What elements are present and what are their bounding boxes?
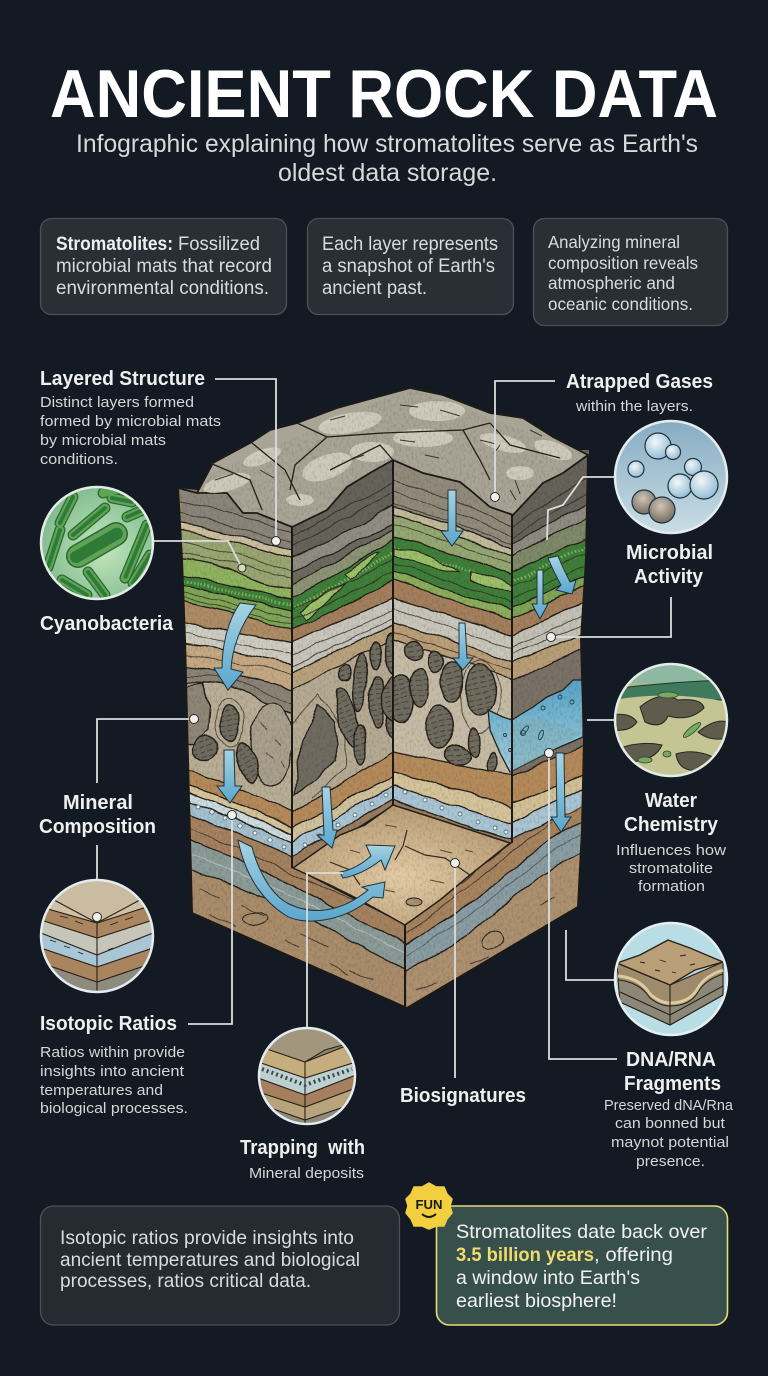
panel: isotopic ratios summary (40, 1206, 400, 1325)
label: isotopic ratios: Isotopic Ratios (40, 1013, 177, 1035)
label: DNA/RNA fragments (604, 1049, 734, 1170)
panel: stromatolites definition: microbial mats that record (56, 256, 272, 277)
panel: each layer (308, 218, 514, 314)
block edges (178, 455, 588, 1008)
subtitle: oldest data storage. (278, 159, 497, 187)
badge: fun: FUN (416, 1197, 442, 1212)
panel: each layer: a snapshot of Earth's (322, 256, 495, 277)
panel: each layer: ancient past. (322, 278, 427, 299)
label: isotopic ratios (40, 1013, 188, 1117)
label: trapped gases (566, 371, 713, 415)
panel: fun fact: earliest biosphere! (456, 1290, 617, 1312)
label: water chemistry: Chemistry (624, 814, 719, 836)
label: DNA/RNA fragments: maynot potential (611, 1134, 729, 1151)
label: microbial activity: Microbial (626, 542, 713, 564)
title: ANCIENT ROCK DATA (50, 56, 718, 132)
panel: mineral analysis: atmospheric and (548, 273, 675, 293)
icon: trapping layers (258, 1028, 356, 1130)
panel: stromatolites definition (40, 218, 286, 314)
label: trapped gases: Atrapped Gases (566, 371, 713, 393)
panel: fun fact: a window into Earth's (456, 1267, 640, 1289)
label: microbial activity: Activity (634, 566, 704, 588)
label: DNA/RNA fragments: Preserved dNA/Rna (604, 1097, 734, 1114)
label: water chemistry: formation (638, 878, 705, 895)
label: layered structure: by microbial mats (40, 432, 166, 449)
label: mineral composition (39, 792, 156, 838)
label: isotopic ratios: Ratios within provide (40, 1044, 185, 1061)
panel: isotopic ratios summary: processes, ratios critical data. (60, 1270, 311, 1292)
label: isotopic ratios: temperatures and (40, 1082, 163, 1099)
label: mineral composition: Mineral (63, 792, 133, 814)
panel: fun fact: , offering (594, 1244, 673, 1266)
water pocket (488, 680, 583, 772)
subtitle: Infographic explaining how stromatolites serve as Earth's (76, 130, 698, 158)
label: layered structure: Layered Structure (40, 368, 205, 390)
arrows (214, 490, 576, 921)
label: microbial activity (626, 542, 713, 588)
label: water chemistry: Influences how (616, 842, 726, 859)
panel: mineral analysis: composition reveals (548, 253, 698, 273)
icon: cyanobacteria (41, 487, 153, 599)
icon: mineral layers (41, 880, 153, 1000)
face: middle left (293, 462, 392, 867)
face: middle right (394, 462, 511, 842)
label: layered structure: formed by microbial mats (40, 413, 221, 430)
label: trapping: Mineral deposits (249, 1165, 364, 1182)
badge: fun (406, 1183, 452, 1229)
face: left (179, 488, 407, 1007)
panel: mineral analysis: Analyzing mineral (548, 232, 680, 252)
label: DNA/RNA fragments: presence. (636, 1153, 705, 1170)
label: isotopic ratios: biological processes. (40, 1100, 188, 1117)
icon: water chemistry (612, 663, 728, 780)
panel: mineral analysis (534, 218, 728, 326)
panel: fun fact: Stromatolites date back over (456, 1221, 708, 1243)
label: trapping: Trapping with (240, 1137, 365, 1159)
panel: isotopic ratios summary: Isotopic ratios provide insights into (60, 1227, 354, 1249)
label: trapping (240, 1137, 365, 1182)
subtitle (76, 130, 698, 187)
label: mineral composition: Composition (39, 816, 156, 838)
label: DNA/RNA fragments: DNA/RNA (626, 1049, 716, 1071)
icon: DNA/RNA strata sample (615, 923, 727, 1035)
panel: stromatolites definition: Fossilized (178, 234, 260, 255)
label: DNA/RNA fragments: can bonned but (615, 1115, 726, 1132)
label: water chemistry: stromatolite (629, 860, 713, 877)
icon: trapped gas bubbles (615, 421, 727, 533)
label: layered structure (40, 368, 221, 468)
label: DNA/RNA fragments: Fragments (624, 1073, 721, 1095)
label: water chemistry: Water (645, 790, 697, 812)
panel: stromatolites definition: Stromatolites: (56, 234, 173, 255)
face: right (513, 450, 589, 842)
floor (293, 805, 510, 925)
label: layered structure: conditions. (40, 451, 118, 468)
label: isotopic ratios: insights into ancient (40, 1063, 185, 1080)
label: trapped gases: within the layers. (575, 398, 693, 415)
panel: mineral analysis: oceanic conditions. (548, 294, 693, 314)
label: cyanobacteria: Cyanobacteria (40, 613, 174, 635)
label: layered structure: Distinct layers formed (40, 394, 194, 411)
face: lower right (406, 806, 582, 1007)
rock top surface (178, 388, 588, 527)
stromatolite cross-section block (160, 385, 600, 1030)
panel: stromatolites definition: environmental conditions. (56, 278, 269, 299)
label: water chemistry (616, 790, 726, 895)
leader lines (97, 379, 671, 1078)
rock grain texture (170, 385, 595, 1015)
panel: each layer: Each layer represents (322, 234, 498, 255)
panel: fun fact (436, 1206, 728, 1325)
panel: isotopic ratios summary: ancient temperatures and biological (60, 1249, 360, 1271)
panel: fun fact: 3.5 billion years (456, 1244, 594, 1266)
label: biosignatures: Biosignatures (400, 1085, 526, 1107)
